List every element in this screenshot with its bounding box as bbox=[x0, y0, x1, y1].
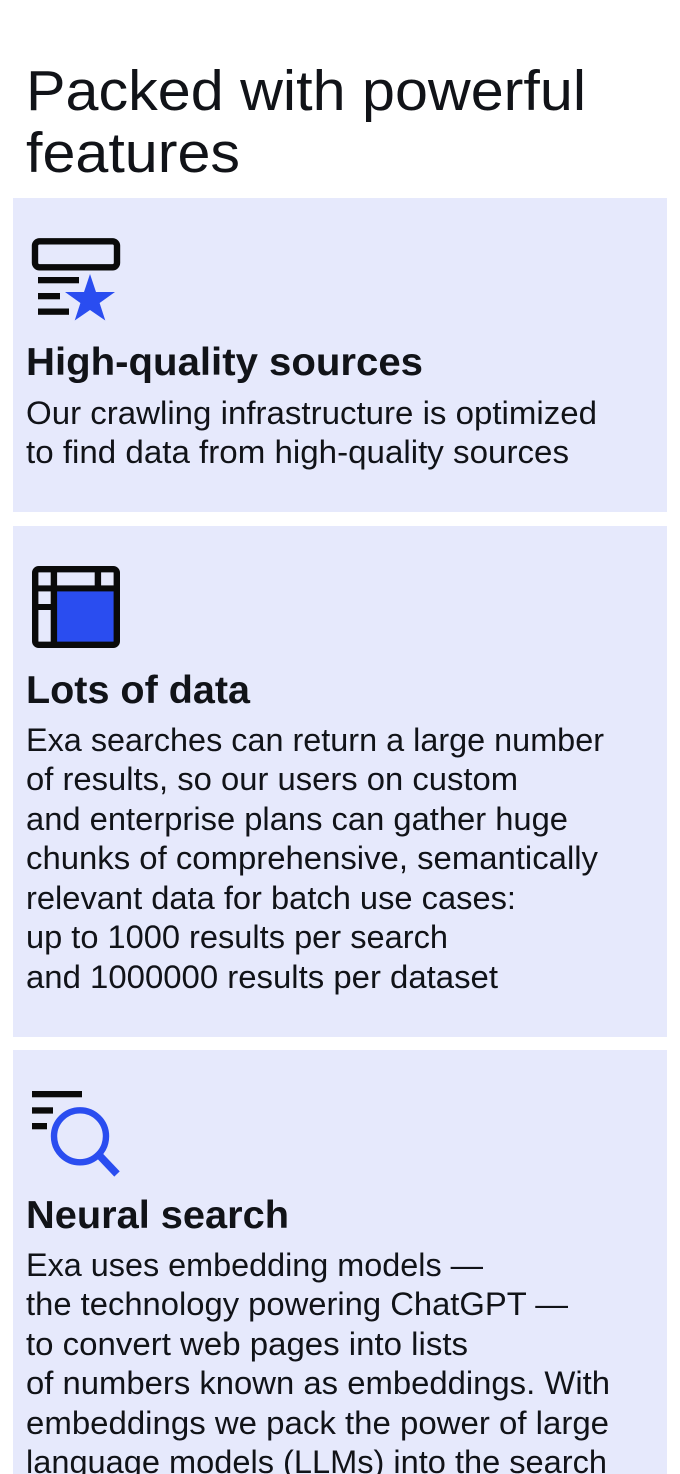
heading: Neural search bbox=[26, 1194, 289, 1237]
description: to find data from high-quality sources bbox=[26, 434, 569, 470]
description: the technology powering ChatGPT — bbox=[26, 1286, 568, 1322]
description bbox=[26, 1247, 610, 1474]
description: and 1000000 results per dataset bbox=[26, 959, 498, 995]
title bbox=[26, 59, 586, 185]
title: Packed with powerful bbox=[26, 59, 586, 123]
description: Exa searches can return a large number bbox=[26, 722, 604, 758]
description: of results, so our users on custom bbox=[26, 761, 518, 797]
panel: neural search bbox=[13, 1050, 667, 1474]
title: features bbox=[26, 121, 240, 185]
description: chunks of comprehensive, semantically bbox=[26, 840, 598, 876]
description: and enterprise plans can gather huge bbox=[26, 801, 568, 837]
description: to convert web pages into lists bbox=[26, 1326, 468, 1362]
description: Our crawling infrastructure is optimized bbox=[26, 395, 597, 431]
heading: Lots of data bbox=[26, 669, 250, 712]
heading: High-quality sources bbox=[26, 341, 423, 384]
description: embeddings we pack the power of large bbox=[26, 1405, 609, 1441]
description bbox=[26, 395, 597, 470]
icon: data table bbox=[35, 569, 117, 645]
description: of numbers known as embeddings. With bbox=[26, 1365, 610, 1401]
description: up to 1000 results per search bbox=[26, 919, 448, 955]
icon: magnifier with lines bbox=[32, 1091, 117, 1174]
icon: document with star bbox=[35, 241, 117, 320]
panel: lots of data bbox=[13, 526, 667, 1037]
description: relevant data for batch use cases: bbox=[26, 880, 516, 916]
panel: high-quality sources bbox=[13, 198, 667, 512]
description: Exa uses embedding models — bbox=[26, 1247, 483, 1283]
description bbox=[26, 722, 604, 995]
